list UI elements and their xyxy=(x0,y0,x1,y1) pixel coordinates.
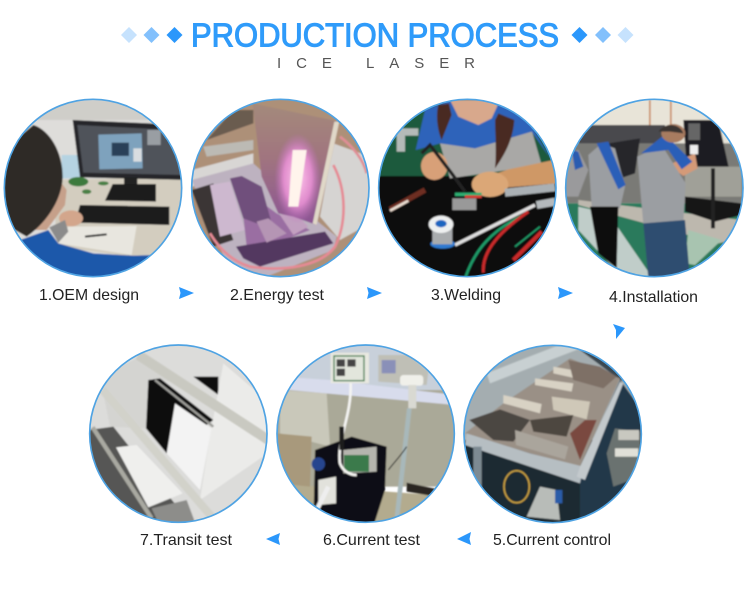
circle border xyxy=(90,345,267,522)
circle border xyxy=(379,99,556,277)
title header xyxy=(121,16,634,72)
label: step 3: 3.Welding xyxy=(431,287,501,304)
arrow: step 2 to 3 xyxy=(367,287,382,299)
arrow: step 4 to 5 xyxy=(613,324,625,339)
arrow: step 6 to 7 xyxy=(266,533,280,545)
label: step 6: 6.Current test xyxy=(323,532,421,549)
panel: step 1 OEM design photo xyxy=(0,97,187,283)
circle border xyxy=(192,99,369,277)
decorative diamonds left xyxy=(121,27,182,43)
label: step 2: 2.Energy test xyxy=(230,287,325,304)
panel: step 6 Current test photo xyxy=(275,343,457,527)
subtitle: ICE LASER xyxy=(277,55,475,72)
label: step 1: 1.OEM design xyxy=(39,287,139,304)
arrow: step 3 to 4 xyxy=(558,287,573,299)
panel: step 4 Installation photo xyxy=(562,97,748,280)
panel: step 5 Current control photo xyxy=(460,340,647,527)
panel: step 2 Energy test photo xyxy=(190,97,372,283)
circle border xyxy=(277,345,454,522)
label: step 4: 4.Installation xyxy=(609,289,698,306)
decorative diamonds right xyxy=(572,27,634,43)
circle border xyxy=(566,99,743,277)
arrow: step 5 to 6 xyxy=(457,532,471,545)
arrow: step 1 to 2 xyxy=(179,287,194,299)
panel: step 7 Transit test photo xyxy=(87,343,273,530)
label: step 7: 7.Transit test xyxy=(140,532,233,549)
label: step 5: 5.Current control xyxy=(493,532,611,549)
circle border xyxy=(4,99,182,277)
circle border xyxy=(464,345,641,523)
panel: step 3 Welding photo xyxy=(375,97,562,283)
heading: PRODUCTION PROCESS xyxy=(191,16,559,54)
